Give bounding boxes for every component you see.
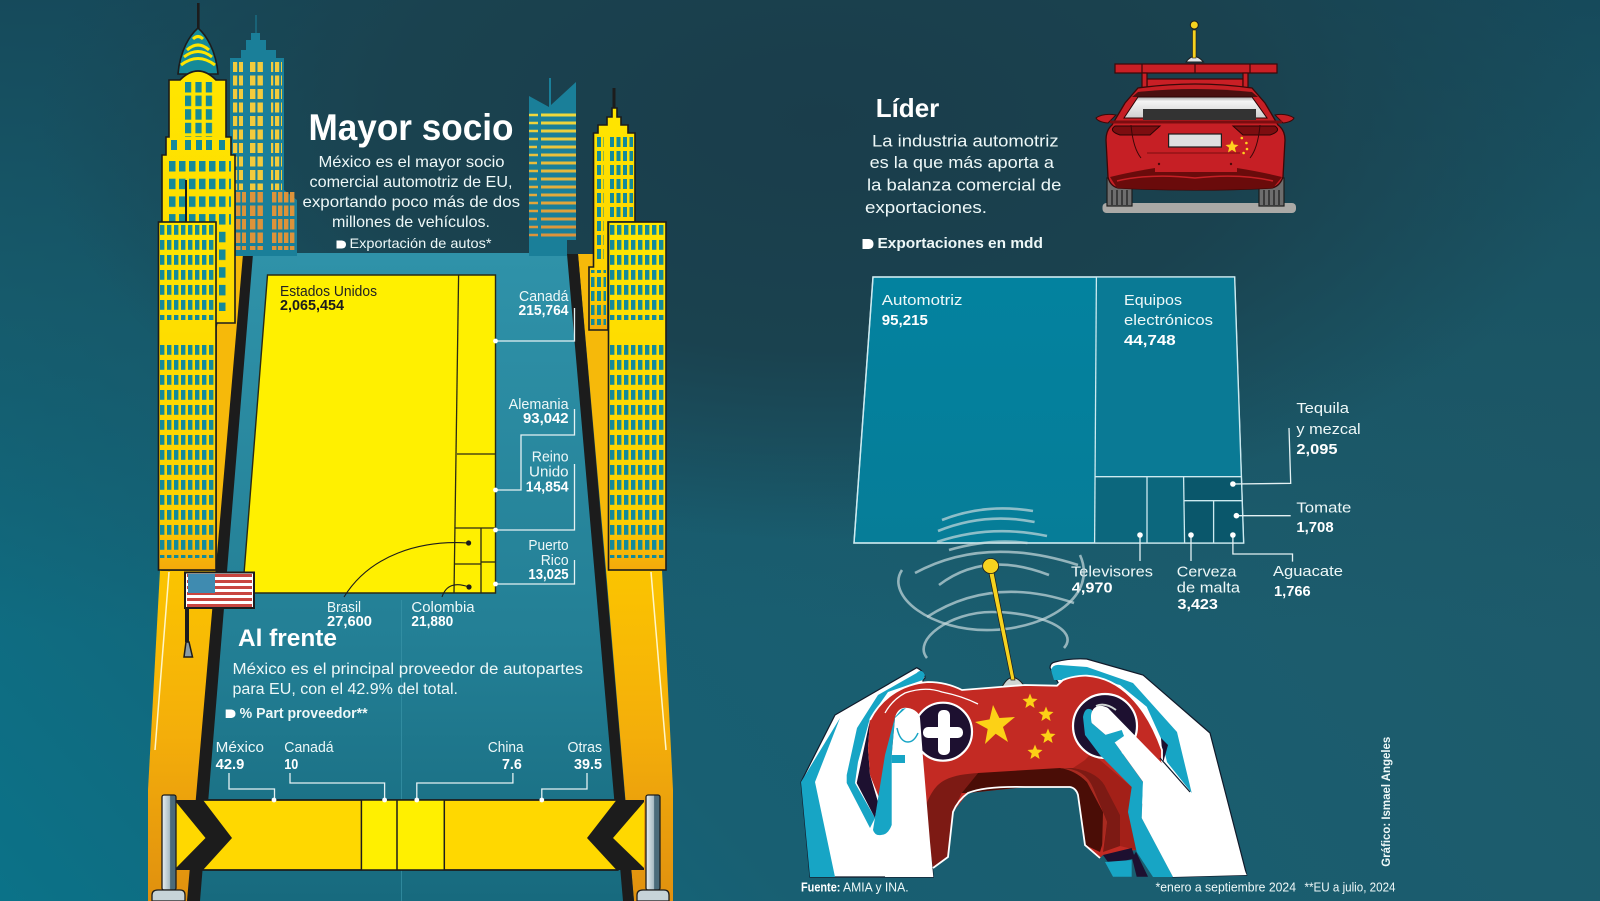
text block: Líder intro: es la que más aporta a: [870, 153, 1055, 172]
label: Puerto Rico: Puerto: [528, 538, 569, 554]
plate: [1169, 134, 1221, 147]
callouts: small category connector lines: [1137, 428, 1292, 562]
icon: right chevron end: [587, 800, 644, 870]
label: Reino Unido: 14,854: [526, 480, 569, 496]
label: Cerveza de malta: Cerveza: [1177, 564, 1237, 581]
icon: left chevron end: [176, 800, 232, 870]
heading: Líder: Líder: [876, 93, 939, 123]
label: Brasil: [327, 600, 372, 630]
label: China share: China: [488, 740, 524, 756]
car body: [1106, 84, 1285, 190]
dark slivers beside controller: [857, 720, 878, 818]
flag stars on car: [1226, 137, 1248, 154]
label: Estados Unidos: Estados Unidos: [280, 284, 377, 300]
icon: US flag on pole: [184, 572, 254, 657]
text block: Mayor socio intro: millones de vehículos.: [332, 214, 490, 231]
illustration: road with side barriers: [148, 253, 673, 901]
legend: Exportaciones en mdd: Exportaciones en mdd: [878, 235, 1043, 252]
illustration: art-deco tower right: [589, 88, 635, 330]
label: Aguacate: Aguacate: [1273, 563, 1343, 580]
right button: [1073, 694, 1137, 758]
label: Cerveza de malta: 3,423: [1178, 596, 1218, 613]
label: Alemania: 93,042: [523, 411, 569, 427]
text block: Líder intro: exportaciones.: [865, 198, 987, 217]
label: Estados Unidos: 2,065,454: [280, 298, 344, 314]
label: Brasil: Brasil: [327, 600, 361, 616]
heading: Mayor socio: Mayor socio: [308, 107, 514, 148]
bumper: [1110, 168, 1282, 190]
icon: right post: [637, 795, 669, 901]
label: Automotriz: Automotriz: [882, 292, 962, 309]
text block: Al frente intro: México es el principal proveedor de autopartes: [232, 661, 583, 678]
label: Brasil: 27,600: [327, 614, 372, 630]
label: Canadá share: Canadá: [284, 740, 335, 756]
heading: Al frente: Al frente: [238, 625, 337, 652]
callouts: Brasil and Colombia leaders: [344, 540, 472, 597]
label: Equipos electrónicos: electrónicos: [1124, 312, 1213, 329]
label: China share: [488, 740, 524, 773]
legend: % Part proveedor: % Part proveedor**: [240, 706, 368, 722]
label: Reino Unido: [526, 450, 569, 496]
controller body: [868, 676, 1162, 868]
label: Colombia: [411, 600, 476, 630]
footnote: [1156, 881, 1396, 895]
chart: banner of auto-part suppliers: [152, 740, 669, 901]
label: Tequila y mezcal: [1296, 400, 1361, 458]
illustration: teal tower behind: [230, 15, 297, 256]
label: Estados Unidos: [280, 284, 377, 314]
label: China share: 7.6: [502, 757, 522, 773]
text block: Líder intro: la balanza comercial de: [867, 176, 1061, 195]
label: Cerveza de malta: [1177, 564, 1241, 613]
label: Canadá share: 10: [284, 757, 298, 773]
label: Puerto Rico: 13,025: [528, 567, 569, 583]
text block: Mayor socio intro: México es el mayor socio: [318, 154, 505, 171]
label: Cerveza de malta: de malta: [1177, 580, 1241, 597]
icon: car antenna: [1186, 21, 1204, 62]
text block: Al frente intro: para EU, con el 42.9% del total.: [232, 681, 458, 698]
platform: [1102, 203, 1296, 213]
label: Tequila y mezcal: 2,095: [1296, 441, 1338, 458]
text block: Líder intro: [865, 132, 1061, 217]
label: Tomate: [1296, 500, 1351, 536]
legend: Exportación de autos: Exportación de autos*: [350, 235, 492, 251]
icon: game controller with hands: [801, 558, 1247, 877]
label: Colombia: 21,880: [411, 614, 453, 630]
label: Equipos electrónicos: 44,748: [1124, 332, 1176, 349]
label: Puerto Rico: Rico: [541, 553, 569, 569]
callouts: white connector lines: [493, 308, 574, 586]
text block: Al frente intro: [232, 661, 583, 698]
text block: Mayor socio intro: exportando poco más de dos: [302, 194, 520, 211]
label: México share: 42.9: [216, 757, 244, 773]
credit: Gráfico: Ismael Angeles: [1379, 736, 1393, 867]
flag stars: [975, 694, 1056, 759]
text block: Mayor socio intro: [302, 154, 520, 231]
label: Otras share: [568, 740, 602, 773]
callouts: supplier connector lines: [229, 773, 587, 802]
label: Colombia: Colombia: [411, 600, 476, 616]
label: Televisores: [1071, 564, 1153, 597]
illustration: low building right: [608, 222, 666, 570]
illustration: low building left: [158, 222, 216, 570]
text block: Líder intro: La industria automotriz: [872, 132, 1059, 151]
spoiler: [1115, 64, 1277, 89]
chart: treemap of exports by sector: [854, 277, 1361, 613]
label: Alemania: [509, 397, 570, 427]
arch shading: [925, 773, 978, 868]
right thumb and palm: [1083, 706, 1247, 877]
source note: [801, 881, 909, 895]
label: Otras share: Otras: [568, 740, 602, 756]
chart: treemap of auto exports: [242, 275, 574, 630]
label: Canadá: Canadá: [519, 289, 569, 305]
label: Tomate: 1,708: [1296, 519, 1334, 536]
illustration: teal striped tower right: [529, 78, 576, 256]
rear window: [1132, 89, 1258, 97]
icon: left post: [152, 795, 185, 901]
icon: radio waves: [898, 508, 1084, 658]
illustration: art-deco tower left: [162, 3, 235, 570]
icon: red car with antenna and Chinese flag: [1096, 21, 1296, 213]
controller lower dark parts: [1103, 848, 1135, 865]
label: Canadá: 215,764: [518, 303, 568, 319]
label: Tomate: Tomate: [1296, 500, 1351, 517]
icon: controller antenna: [983, 558, 1025, 687]
label: Aguacate: 1,766: [1274, 583, 1311, 600]
left button with cross: [914, 703, 972, 761]
source note: Fuente:: [801, 881, 840, 895]
label: Otras share: 39.5: [574, 757, 602, 773]
label: Aguacate: [1273, 563, 1343, 600]
label: Alemania: Alemania: [509, 397, 570, 413]
label: Puerto Rico: [528, 538, 569, 583]
label: Canadá share: [284, 740, 335, 773]
label: Televisores: Televisores: [1071, 564, 1153, 581]
label: Canadá: [518, 289, 569, 319]
label: Automotriz: 95,215: [882, 312, 928, 329]
source note: AMIA y INA.: [843, 881, 909, 895]
label: Equipos electrónicos: Equipos: [1124, 292, 1182, 309]
left thumb and palm: [873, 708, 933, 877]
right hand back: [1050, 659, 1247, 877]
label: Reino Unido: Unido: [529, 465, 569, 481]
label: Automotriz: [882, 292, 962, 329]
label: Televisores: 4,970: [1072, 580, 1112, 597]
text block: Mayor socio intro: comercial automotriz de EU,: [310, 174, 512, 191]
label: México share: [216, 740, 264, 773]
label: México share: México: [216, 740, 264, 756]
label: Reino Unido: Reino: [532, 450, 569, 466]
footnote: *enero a septiembre 2024: [1156, 881, 1296, 895]
left hand back: [801, 668, 933, 877]
wheels: [1107, 178, 1284, 206]
label: Tequila y mezcal: y mezcal: [1296, 421, 1361, 438]
label: Tequila y mezcal: Tequila: [1296, 400, 1350, 417]
label: Equipos electrónicos: [1124, 292, 1213, 349]
footnote: **EU a julio, 2024: [1304, 881, 1396, 895]
